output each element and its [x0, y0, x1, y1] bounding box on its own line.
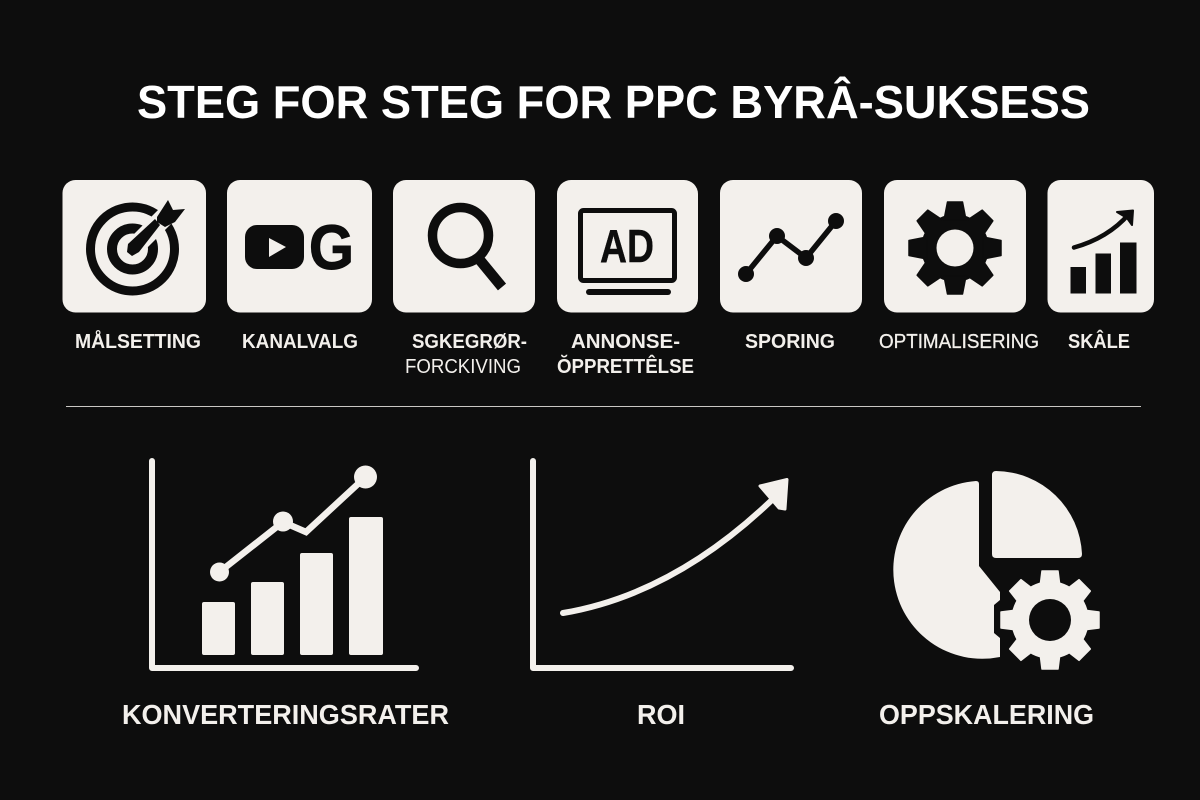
- step 3: søkeordsforskning: SGKEGRØR-: [412, 331, 527, 353]
- step 1: målsetting: MÅLSETTING: [75, 329, 201, 353]
- chart: oppskalering: [879, 471, 1099, 730]
- trend line: [210, 466, 377, 582]
- step 2: kanalvalg: [227, 180, 372, 353]
- bars: [202, 517, 383, 655]
- step 3: søkeordsforskning: FORCKIVING: [405, 356, 521, 378]
- step 5: sporing: SPORING: [745, 331, 835, 353]
- step 2: kanalvalg: KANALVALG: [242, 331, 358, 353]
- step 4: annonseopprettelse: ŎPPRETTÊLSE: [557, 354, 694, 378]
- roi axes: [533, 461, 791, 668]
- step 1: målsetting: [62, 180, 206, 353]
- chart: oppskalering: OPPSKALERING: [879, 699, 1094, 730]
- icon: gear: [909, 202, 1001, 294]
- icon: AD screen: [580, 210, 674, 295]
- chart axes: [152, 461, 416, 668]
- icon: growing bars with arrow: [1070, 210, 1136, 294]
- icon: video and G logo: G: [309, 213, 354, 283]
- rising arrow: [563, 480, 787, 613]
- pie left slice: [893, 481, 1000, 659]
- pie quarter slice: [992, 471, 1082, 558]
- gear: [1001, 571, 1099, 669]
- icon: video and G logo: [245, 213, 354, 283]
- icon: target with dart: [90, 200, 185, 291]
- step 7: skåle: [1048, 180, 1154, 353]
- chart: konverteringsrater: KONVERTERINGSRATER: [122, 699, 449, 730]
- step 5: sporing: [720, 180, 862, 353]
- icon: magnifying glass: [432, 208, 502, 287]
- step 6: optimalisering: OPTIMALISERING: [879, 331, 1039, 353]
- title: STEG FOR STEG FOR PPC BYRÂ-SUKSESS: [137, 76, 1090, 128]
- step 3: søkeordsforskning: [393, 180, 535, 378]
- chart: roi: [533, 461, 791, 730]
- step 4: annonseopprettelse: ANNONSE-: [571, 331, 680, 353]
- icon: tracking line: [738, 213, 844, 282]
- step 6: optimalisering: [879, 180, 1039, 353]
- step 7: skåle: SKÂLE: [1068, 329, 1130, 353]
- chart: roi: ROI: [637, 699, 685, 730]
- icon: AD screen: AD: [600, 220, 654, 272]
- chart: konverteringsrater: [122, 461, 449, 730]
- step 4: annonseopprettelse: [557, 180, 698, 378]
